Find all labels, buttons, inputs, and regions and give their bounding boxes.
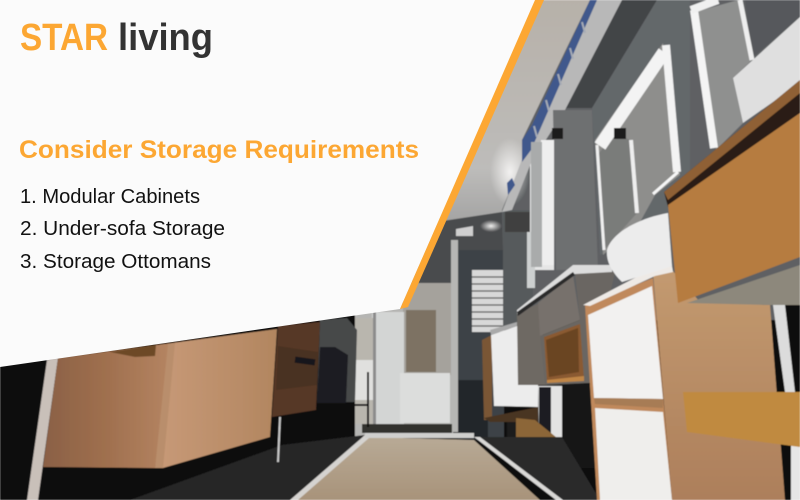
wood niche bbox=[544, 324, 584, 382]
logo: STAR bbox=[20, 17, 108, 59]
mirror bbox=[595, 43, 680, 255]
left wood cabinet bbox=[43, 343, 172, 468]
threshold bbox=[362, 424, 452, 433]
small white cabinet bbox=[482, 335, 492, 420]
list bbox=[20, 186, 225, 273]
underside bbox=[687, 265, 800, 305]
soffit bbox=[565, 0, 657, 108]
sink bbox=[607, 213, 672, 282]
grey wall panel bbox=[553, 110, 598, 270]
back shower bbox=[458, 250, 504, 440]
dark wood cabinet bbox=[272, 322, 320, 417]
white box bbox=[733, 17, 800, 123]
heading: Consider Storage Requirements bbox=[19, 136, 419, 164]
clip bbox=[552, 128, 563, 139]
ceiling bbox=[430, 0, 590, 240]
left white leg bbox=[27, 358, 58, 500]
left raised platform bbox=[130, 435, 365, 500]
right raised platform bbox=[474, 437, 600, 500]
black base area bbox=[538, 384, 608, 468]
grey cabinet bbox=[517, 265, 615, 385]
countertop bbox=[583, 266, 673, 306]
item 2: 2. Under-sofa Storage bbox=[20, 218, 225, 240]
logo: living bbox=[118, 17, 213, 59]
radiator bbox=[472, 270, 504, 332]
mirror 2 bbox=[691, 0, 800, 150]
white panel bbox=[541, 140, 554, 265]
white drawers bbox=[588, 286, 663, 399]
white panel bbox=[0, 0, 536, 367]
item 1: 1. Modular Cabinets bbox=[20, 186, 200, 208]
table leg bbox=[336, 372, 368, 427]
dark grey cabinet bbox=[317, 318, 357, 403]
wood shelf bbox=[683, 392, 800, 447]
cardboard box bbox=[516, 418, 562, 452]
back wall bbox=[410, 212, 505, 330]
shower glass bbox=[355, 305, 453, 437]
blue shelf items bbox=[522, 0, 597, 162]
floor bbox=[290, 437, 540, 500]
item 3: 3. Storage Ottomans bbox=[20, 251, 211, 273]
top wood drawer bbox=[664, 80, 800, 207]
logo bbox=[20, 17, 213, 59]
post and black corner bbox=[785, 305, 800, 395]
orange diagonal band bbox=[400, 0, 544, 309]
large wood side bbox=[653, 270, 785, 500]
